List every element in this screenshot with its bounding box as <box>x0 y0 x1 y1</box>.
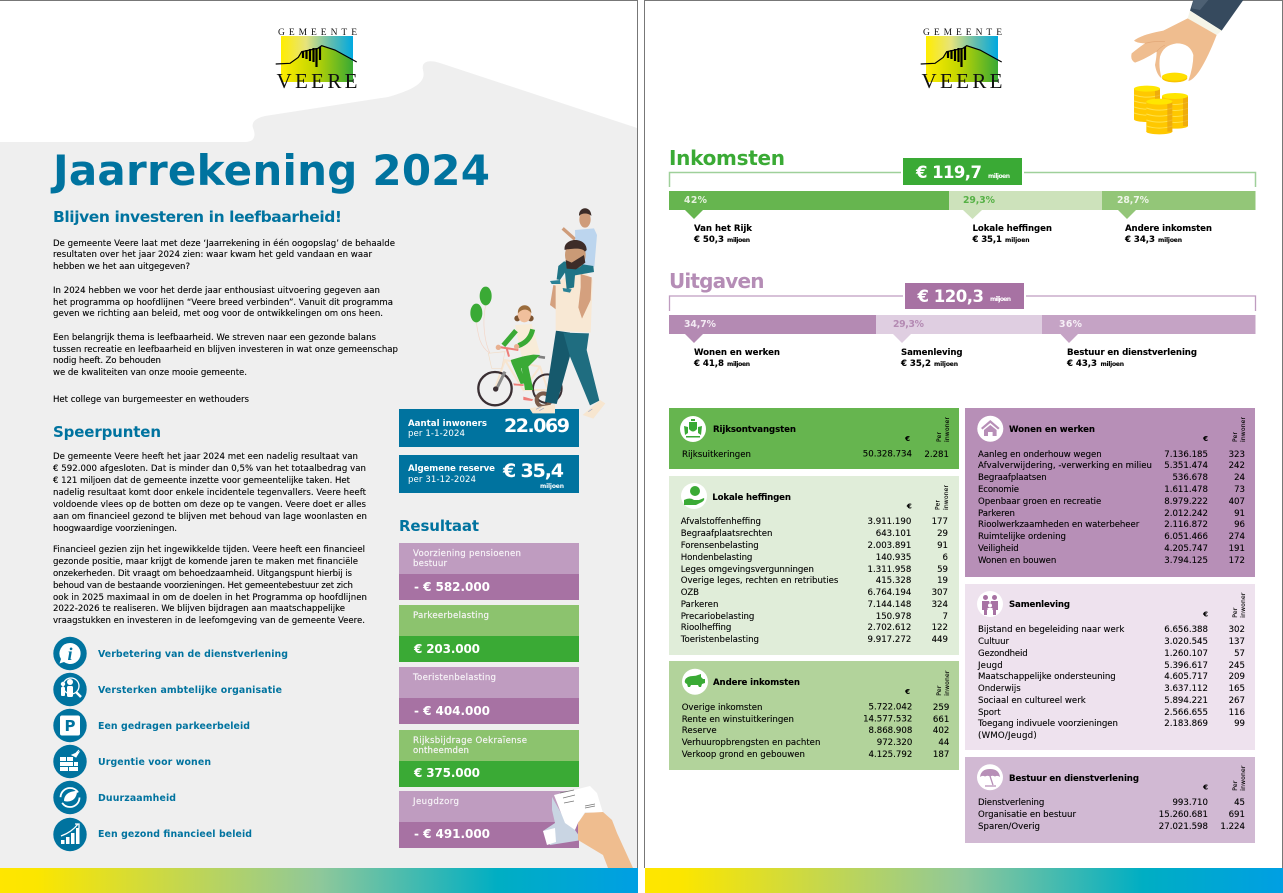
panel: Rijksontvangsten: Rijksuitkeringen <box>682 450 751 460</box>
panel: Lokale heffingen: inwoner <box>943 484 950 510</box>
table rows <box>682 702 949 760</box>
table rows: Verkoop grond en gebouwen <box>682 750 805 760</box>
table rows: 2.183.869 <box>1164 719 1208 729</box>
text block: Speerpunten body: gezonde positie, maar krijgt de komende jaren te maken met financiële <box>53 557 358 567</box>
text block: Speerpunten body: onzekerheden. Dit vraagt om behoedzaamheid. Uitgangspunt hierbij is <box>53 569 353 579</box>
table rows: Economie <box>978 485 1019 495</box>
icon: bricks and trowel <box>53 745 87 778</box>
label: Wonen en werken <box>693 348 780 369</box>
label: Samenleving <box>900 348 962 369</box>
text block: introduction: resultaten over het jaar 2024 zien: waar kwam het geld vandaan en waar <box>53 250 372 260</box>
label: Wonen en werken: € 41,8 <box>693 359 724 369</box>
heading: Blijven investeren: Blijven investeren in leefbaarheid! <box>53 208 342 226</box>
table rows: 1.611.478 <box>1164 485 1208 495</box>
table rows: Begraafplaatsrechten <box>681 529 772 539</box>
panel: Rijksontvangsten: 50.328.734 <box>863 450 912 460</box>
table rows: Organisatie en bestuur <box>978 810 1076 820</box>
illustration: family with bicycle <box>470 208 605 419</box>
table rows: 274 <box>1229 532 1245 542</box>
segmented bar: 29,3% <box>963 195 996 206</box>
label: Lokale heffingen: miljoen <box>1005 237 1030 244</box>
table rows: 73 <box>1234 485 1245 495</box>
table rows <box>977 625 1245 741</box>
text block: Speerpunten body: vraagstukken en investeren in de leefomgeving van de gemeente Veere. <box>53 616 365 626</box>
table rows: Gezondheid <box>978 649 1028 659</box>
table rows: 5.396.617 <box>1164 661 1208 671</box>
table rows: 6.656.388 <box>1164 625 1208 635</box>
page: left background <box>0 61 637 868</box>
table rows: 150.978 <box>876 612 911 622</box>
text block: Speerpunten body <box>53 452 367 626</box>
text block: introduction <box>53 238 398 405</box>
table rows: 661 <box>933 715 949 725</box>
panel: Rijksontvangsten: € <box>904 435 910 443</box>
girl <box>496 305 540 401</box>
table rows: 191 <box>1229 544 1245 554</box>
table rows: 91 <box>937 541 948 551</box>
table rows: 8.979.222 <box>1164 497 1208 507</box>
table rows: Bijstand en begeleiding naar werk <box>978 625 1124 635</box>
table rows: Sparen/Overig <box>978 822 1040 832</box>
table rows: 29 <box>937 529 948 539</box>
table rows: 407 <box>1229 497 1245 507</box>
panel: Samenleving: € <box>1202 611 1208 619</box>
table rows: 415.328 <box>876 576 911 586</box>
text block: Speerpunten body: € 121 miljoen dat de gemeente inzette voor gemeentelijke taken. Het <box>53 476 351 486</box>
table rows: Maatschappelijke ondersteuning <box>978 672 1116 682</box>
icon: family <box>977 591 1003 617</box>
table rows: 6.764.194 <box>868 588 911 598</box>
icon: parking <box>53 709 87 742</box>
table rows: 972.320 <box>877 738 912 748</box>
table rows: 242 <box>1229 461 1245 471</box>
heading: Uitgaven: Uitgaven <box>669 269 764 293</box>
stat box: aantal inwoners: Aantal inwoners <box>408 419 487 429</box>
table rows: 177 <box>932 517 948 527</box>
table rows: 1.260.107 <box>1164 649 1208 659</box>
table rows: 96 <box>1234 520 1245 530</box>
label: Van het Rijk: miljoen <box>727 237 750 244</box>
table rows: 57 <box>1234 649 1245 659</box>
segmented bar: 42% <box>684 195 708 206</box>
segmented bar <box>669 315 1256 343</box>
panel: Wonen en werken: inwoner <box>1240 416 1247 442</box>
label: Bestuur en dienstverlening <box>1066 348 1197 369</box>
table rows: 14.577.532 <box>863 714 912 724</box>
stat box: algemene reserve: Algemene reserve <box>408 464 495 474</box>
label: Wonen en werken: miljoen <box>727 361 750 368</box>
table rows: 2.003.891 <box>868 541 911 551</box>
table rows: 19 <box>937 576 948 586</box>
text block: Speerpunten body: De gemeente Veere heeft het jaar 2024 met een nadelig resultaat van <box>53 452 358 462</box>
table rows: Wonen en bouwen <box>978 556 1056 566</box>
label: dienstverlening: Verbetering van de dienstverlening <box>98 649 288 660</box>
table rows: Onderwijs <box>978 684 1021 694</box>
table rows: 27.021.598 <box>1159 822 1208 832</box>
hand <box>1131 18 1217 81</box>
text block: Speerpunten body: voldoende vlees op de botten om deze op te vangen. Veere doet er alles <box>53 500 367 510</box>
stat box: algemene reserve <box>399 455 579 493</box>
table rows: 1.224 <box>1220 822 1245 832</box>
result: Voorziening pensioenen bestuur <box>399 543 579 600</box>
text block: Speerpunten body: behoud van de bestaande voorzieningen. Het gemeentebestuur zet zich <box>53 581 353 591</box>
result: Toeristenbelasting <box>399 667 579 724</box>
label: Van het Rijk: € 50,3 <box>693 235 724 245</box>
heading: Inkomsten: Inkomsten <box>669 146 785 170</box>
table rows: Verhuuropbrengsten en pachten <box>682 738 820 748</box>
table rows: (WMO/Jeugd) <box>978 731 1037 741</box>
gradient bar right <box>645 868 1283 893</box>
text block: introduction: tussen recreatie en leefbaarheid en blijven investeren in wat onze gemeenschap <box>53 345 398 355</box>
table rows: 187 <box>933 750 949 760</box>
panel: Wonen en werken: € <box>1202 435 1208 443</box>
table rows: 165 <box>1229 684 1245 694</box>
table rows: Afvalverwijdering, -verwerking en milieu <box>978 461 1152 471</box>
table rows: 116 <box>1229 708 1245 718</box>
sleeve <box>1188 0 1243 35</box>
total box <box>903 158 1022 185</box>
table rows: 2.012.242 <box>1164 509 1208 519</box>
table rows: Ruimtelijke ordening <box>978 532 1066 542</box>
table rows: Sport <box>978 708 1001 718</box>
text block: introduction: hebben we het aan uitgegeven? <box>53 262 190 272</box>
table rows: 3.911.190 <box>868 517 911 527</box>
title: Jaarrekening 2024 <box>50 146 490 195</box>
table rows: 5.722.042 <box>869 702 912 712</box>
label: Andere inkomsten <box>1124 224 1212 245</box>
stat box: aantal inwoners: per 1-1-2024 <box>408 429 465 439</box>
segmented bar: 28,7% <box>1117 195 1150 206</box>
segmented bar: 36% <box>1059 319 1083 330</box>
table rows <box>978 450 1245 566</box>
total box: miljoen <box>988 173 1010 180</box>
text block: Speerpunten body: ook in 2025 maximaal in om de doelen in het Programma op hoofdlijnen <box>53 593 367 603</box>
result: Jeugdzorg: - € 491.000 <box>414 827 490 841</box>
table rows: Begraafplaatsen <box>978 473 1047 483</box>
table rows: 91 <box>1234 509 1245 519</box>
table rows: Afvalstoffenheffing <box>681 517 761 527</box>
table rows: 1.311.958 <box>868 565 911 575</box>
result: Jeugdzorg <box>399 791 579 848</box>
table rows: Toegang indivuele voorzieningen <box>977 719 1118 729</box>
icon: people with magnifier <box>53 673 87 706</box>
label: Samenleving: € 35,2 <box>900 359 931 369</box>
table rows: 3.794.125 <box>1164 556 1208 566</box>
text block: introduction: nodig heeft. Zo behouden <box>53 356 161 366</box>
icon: information <box>53 637 87 670</box>
panel: Rijksontvangsten: Per <box>936 431 943 442</box>
icon: crest <box>680 416 706 442</box>
stat box: aantal inwoners: 22.069 <box>504 415 570 437</box>
stat box: algemene reserve: € 35,4 <box>502 460 564 482</box>
table rows: 449 <box>932 635 948 645</box>
table rows: Overige leges, rechten en retributies <box>681 576 839 586</box>
panel: Rijksontvangsten: 2.281 <box>924 450 949 460</box>
label: Wonen en werken: Wonen en werken <box>694 348 780 358</box>
gradient bar left <box>0 868 638 893</box>
text block: Speerpunten body: 2022-2026 te realiseren. We blijven bijdragen aan maatschappelijke <box>53 604 345 614</box>
panel: Wonen en werken: Wonen en werken <box>1009 425 1095 435</box>
label: financieel beleid: Een gezond financieel beleid <box>98 829 252 840</box>
icon: sustainability leaf <box>53 781 87 814</box>
table rows <box>978 798 1245 832</box>
panel: Wonen en werken: Per <box>1232 431 1239 442</box>
panel: Bestuur en dienstverlening: Per <box>1232 780 1239 791</box>
logo: Gemeente Veere right <box>921 28 1002 93</box>
label: ambtelijke organisatie: Versterken ambtelijke organisatie <box>98 685 282 696</box>
text block: Speerpunten body: Financieel gezien zijn het ingewikkelde tijden. Veere heeft een financieel <box>53 545 365 555</box>
table rows: Rente en winstuitkeringen <box>682 715 794 725</box>
panel: Rijksontvangsten <box>669 408 959 469</box>
icon: hand with coin <box>681 483 707 509</box>
coin held <box>1162 73 1187 82</box>
table rows: Jeugd <box>977 661 1003 671</box>
table rows: 324 <box>932 600 948 610</box>
label: Van het Rijk: Van het Rijk <box>694 224 752 234</box>
label: Lokale heffingen: Lokale heffingen <box>972 224 1052 234</box>
result: Voorziening pensioenen bestuur: - € 582.000 <box>414 580 490 594</box>
table rows: 323 <box>1229 450 1245 460</box>
label: Lokale heffingen <box>972 224 1052 245</box>
table rows: Reserve <box>682 726 717 736</box>
table rows: 643.101 <box>876 529 911 539</box>
stat box: algemene reserve: miljoen <box>540 483 564 490</box>
table rows: Aanleg en onderhouw wegen <box>978 450 1102 460</box>
table rows: 6.051.466 <box>1164 532 1208 542</box>
heading: Speerpunten: Speerpunten <box>53 423 161 441</box>
table rows: 3.020.545 <box>1164 637 1208 647</box>
table rows: 2.702.612 <box>868 623 911 633</box>
table rows: 402 <box>933 726 949 736</box>
table rows: 6 <box>943 553 948 563</box>
label: Van het Rijk <box>693 224 752 245</box>
panel: Lokale heffingen: Per <box>934 499 942 510</box>
table rows: 4.205.747 <box>1164 544 1208 554</box>
total box: miljoen <box>990 296 1011 303</box>
table rows <box>680 517 948 645</box>
table rows: 7.136.185 <box>1164 450 1208 460</box>
text block: introduction: In 2024 hebben we voor het derde jaar enthousiast uitvoering gegeven aan <box>53 286 380 296</box>
illustration: hand with receipt <box>543 786 633 868</box>
logo: Gemeente Veere right: GEMEENTE <box>923 28 1002 38</box>
panel: Andere inkomsten: inwoner <box>944 670 951 696</box>
text block: introduction: het programma op hoofdlijnen “Veere breed verbinden”. Vanuit dit programma <box>53 298 393 308</box>
panel: Samenleving: inwoner <box>1240 592 1247 618</box>
table rows: 5.351.474 <box>1164 461 1208 471</box>
icon: parking: P <box>64 717 76 735</box>
icon: umbrella <box>977 764 1003 790</box>
label: Bestuur en dienstverlening: miljoen <box>1100 361 1124 368</box>
table rows: 2.566.655 <box>1164 708 1208 718</box>
table rows: 691 <box>1229 810 1245 820</box>
table rows: 245 <box>1229 661 1245 671</box>
table rows: Sociaal en cultureel werk <box>978 696 1086 706</box>
result: Voorziening pensioenen bestuur: bestuur <box>413 559 447 569</box>
table rows: 24 <box>1234 473 1245 483</box>
table rows: Parkeren <box>681 600 718 610</box>
result: Parkeerbelasting: € 203.000 <box>413 642 480 656</box>
table rows: 302 <box>1229 625 1245 635</box>
table rows: 15.260.681 <box>1159 810 1208 820</box>
table rows: Overige inkomsten <box>682 703 762 713</box>
text block: Speerpunten body: nadelig resultaat komt door enkele incidentele tegenvallers. Veere heeft <box>53 488 367 498</box>
panel: Lokale heffingen: Lokale heffingen <box>712 493 791 503</box>
label: Bestuur en dienstverlening: € 43,3 <box>1066 359 1097 369</box>
panel: Samenleving: Per <box>1232 607 1239 618</box>
panel: Bestuur en dienstverlening: inwoner <box>1240 765 1247 791</box>
panel: Lokale heffingen: € <box>906 503 912 511</box>
segmented bar <box>669 191 1256 219</box>
text block: introduction: Het college van burgemeester en wethouders <box>53 395 250 405</box>
table rows: 536.678 <box>1172 473 1208 483</box>
table rows: 45 <box>1234 798 1245 808</box>
table rows: 99 <box>1234 719 1245 729</box>
table rows: 172 <box>1229 556 1245 566</box>
panel: Samenleving: Samenleving <box>1009 600 1070 610</box>
table rows: Hondenbelasting <box>681 553 752 563</box>
table rows: 137 <box>1229 637 1245 647</box>
illustration: hand with coins <box>1131 0 1243 134</box>
icon: house <box>977 416 1003 442</box>
panel: Bestuur en dienstverlening <box>965 757 1255 843</box>
coin stack 1 <box>1134 86 1160 122</box>
table rows: 44 <box>938 738 949 748</box>
segmented bar: 29,3% <box>893 319 925 330</box>
table rows: 993.710 <box>1172 798 1208 808</box>
table rows: 8.868.908 <box>869 726 912 736</box>
icon: piggy bank <box>682 669 708 695</box>
panel: Bestuur en dienstverlening: € <box>1202 784 1208 792</box>
result: Rijksbijdrage Oekraïense ontheemden: € 375.000 <box>413 766 480 780</box>
table rows: 5.894.221 <box>1164 696 1208 706</box>
table rows: 7 <box>943 612 948 622</box>
table rows: 267 <box>1229 696 1245 706</box>
stat box: algemene reserve: per 31-12-2024 <box>408 475 476 485</box>
text block: introduction: Een belangrijk thema is leefbaarheid. We streven naar een gezonde balans <box>53 333 377 343</box>
label: Samenleving: miljoen <box>934 361 958 368</box>
panel: Andere inkomsten: Per <box>936 685 943 696</box>
panel: Andere inkomsten <box>669 661 959 770</box>
result: Rijksbijdrage Oekraïense ontheemden: ontheemden <box>413 746 469 756</box>
table rows: OZB <box>681 588 699 598</box>
table rows: Leges omgevingsvergunningen <box>681 565 814 575</box>
panel: Wonen en werken <box>965 408 1255 577</box>
result: Parkeerbelasting: Parkeerbelasting <box>413 611 489 621</box>
icon: information: i <box>67 644 73 664</box>
total box: € 119,7 <box>915 163 982 182</box>
table rows: 4.605.717 <box>1164 672 1208 682</box>
result: Toeristenbelasting: - € 404.000 <box>414 704 490 718</box>
table rows: Parkeren <box>978 509 1015 519</box>
logo: Gemeente Veere left <box>276 28 358 93</box>
text block: Speerpunten body: aan om financieel gezond te blijven met behoud van lage woonlasten en <box>53 512 367 522</box>
result: Voorziening pensioenen bestuur: Voorziening pensioenen <box>413 549 521 559</box>
table rows: 209 <box>1229 672 1245 682</box>
table rows: 7.144.148 <box>868 600 911 610</box>
text block: introduction: geven we richting aan beleid, met oog voor de ontwikkelingen om ons heen. <box>53 309 383 319</box>
table rows: Toeristenbelasting <box>680 635 759 645</box>
panel: Rijksontvangsten: Rijksontvangsten <box>713 425 796 435</box>
icon: growth chart <box>53 818 87 851</box>
coin stack 3 <box>1146 99 1172 134</box>
panel: Bestuur en dienstverlening: Bestuur en dienstverlening <box>1009 774 1139 784</box>
table rows: Veiligheid <box>978 544 1019 554</box>
label: Andere inkomsten: Andere inkomsten <box>1125 224 1212 234</box>
section: Uitgaven <box>669 269 1256 369</box>
label: parkeerbeleid: Een gedragen parkeerbeleid <box>98 721 250 732</box>
panel: Andere inkomsten: Andere inkomsten <box>713 678 800 688</box>
bracket line <box>670 172 1256 187</box>
table rows: 140.935 <box>876 553 911 563</box>
panel: Lokale heffingen <box>669 476 959 655</box>
label: wonen: Urgentie voor wonen <box>98 757 211 768</box>
table rows: Precariobelasting <box>681 612 754 622</box>
table rows: Dienstverlening <box>978 798 1044 808</box>
result: Rijksbijdrage Oekraïense ontheemden: Rijksbijdrage Oekraïense <box>413 736 527 746</box>
panel: Andere inkomsten: € <box>904 688 910 696</box>
table rows: Openbaar groen en recreatie <box>978 497 1101 507</box>
table rows: 2.116.872 <box>1164 520 1208 530</box>
table rows: 259 <box>933 703 949 713</box>
heading: Resultaat: Resultaat <box>399 517 479 535</box>
bicycle <box>478 347 562 407</box>
result: Toeristenbelasting: Toeristenbelasting <box>412 673 496 683</box>
panel: Samenleving <box>965 584 1255 750</box>
father carrying child <box>529 208 605 419</box>
result: Rijksbijdrage Oekraïense ontheemden <box>399 730 579 787</box>
table rows: 59 <box>937 565 948 575</box>
logo: Gemeente Veere right: VEERE <box>922 69 1002 93</box>
table rows: Forensenbelasting <box>681 541 759 551</box>
result: Jeugdzorg: Jeugdzorg <box>412 797 459 807</box>
label: Lokale heffingen: € 35,1 <box>972 235 1002 245</box>
logo: Gemeente Veere left: GEMEENTE <box>278 28 357 38</box>
result: Parkeerbelasting <box>399 605 579 662</box>
table rows: 4.125.792 <box>869 750 912 760</box>
text block: Speerpunten body: hoogwaardige voorzieningen. <box>53 524 177 534</box>
total box: € 120,3 <box>916 287 984 306</box>
logo: Gemeente Veere left: VEERE <box>276 69 358 93</box>
label: Samenleving: Samenleving <box>901 348 962 358</box>
table rows: 9.917.272 <box>868 635 911 645</box>
table rows: Rioolwerkzaamheden en waterbeheer <box>978 520 1140 530</box>
stat box: aantal inwoners <box>399 409 579 447</box>
balloons <box>470 287 492 353</box>
section: Inkomsten <box>669 146 1256 245</box>
table rows: 3.637.112 <box>1164 684 1208 694</box>
label: Andere inkomsten: miljoen <box>1158 237 1182 244</box>
segmented bar: 34,7% <box>684 319 717 330</box>
panel: Rijksontvangsten: inwoner <box>944 416 951 442</box>
bracket line <box>670 296 1256 311</box>
label: Bestuur en dienstverlening: Bestuur en dienstverlening <box>1067 348 1197 358</box>
total box <box>905 283 1024 309</box>
text block: Speerpunten body: € 592.000 afgesloten. Dat is minder dan 0,5% van het totaalbedrag van <box>53 464 366 474</box>
label: duurzaamheid: Duurzaamheid <box>98 793 176 804</box>
table rows: Cultuur <box>978 637 1009 647</box>
coin stack 2 <box>1162 93 1188 129</box>
table rows: 122 <box>932 623 948 633</box>
table rows: Rioolheffing <box>681 623 731 633</box>
label: Andere inkomsten: € 34,3 <box>1124 235 1155 245</box>
text block: introduction: we de kwaliteiten van onze mooie gemeente. <box>53 368 247 378</box>
text block: introduction: De gemeente Veere laat met deze ‘Jaarrekening in één oogopslag’ de behaalde <box>53 238 395 249</box>
table rows: 307 <box>932 588 948 598</box>
